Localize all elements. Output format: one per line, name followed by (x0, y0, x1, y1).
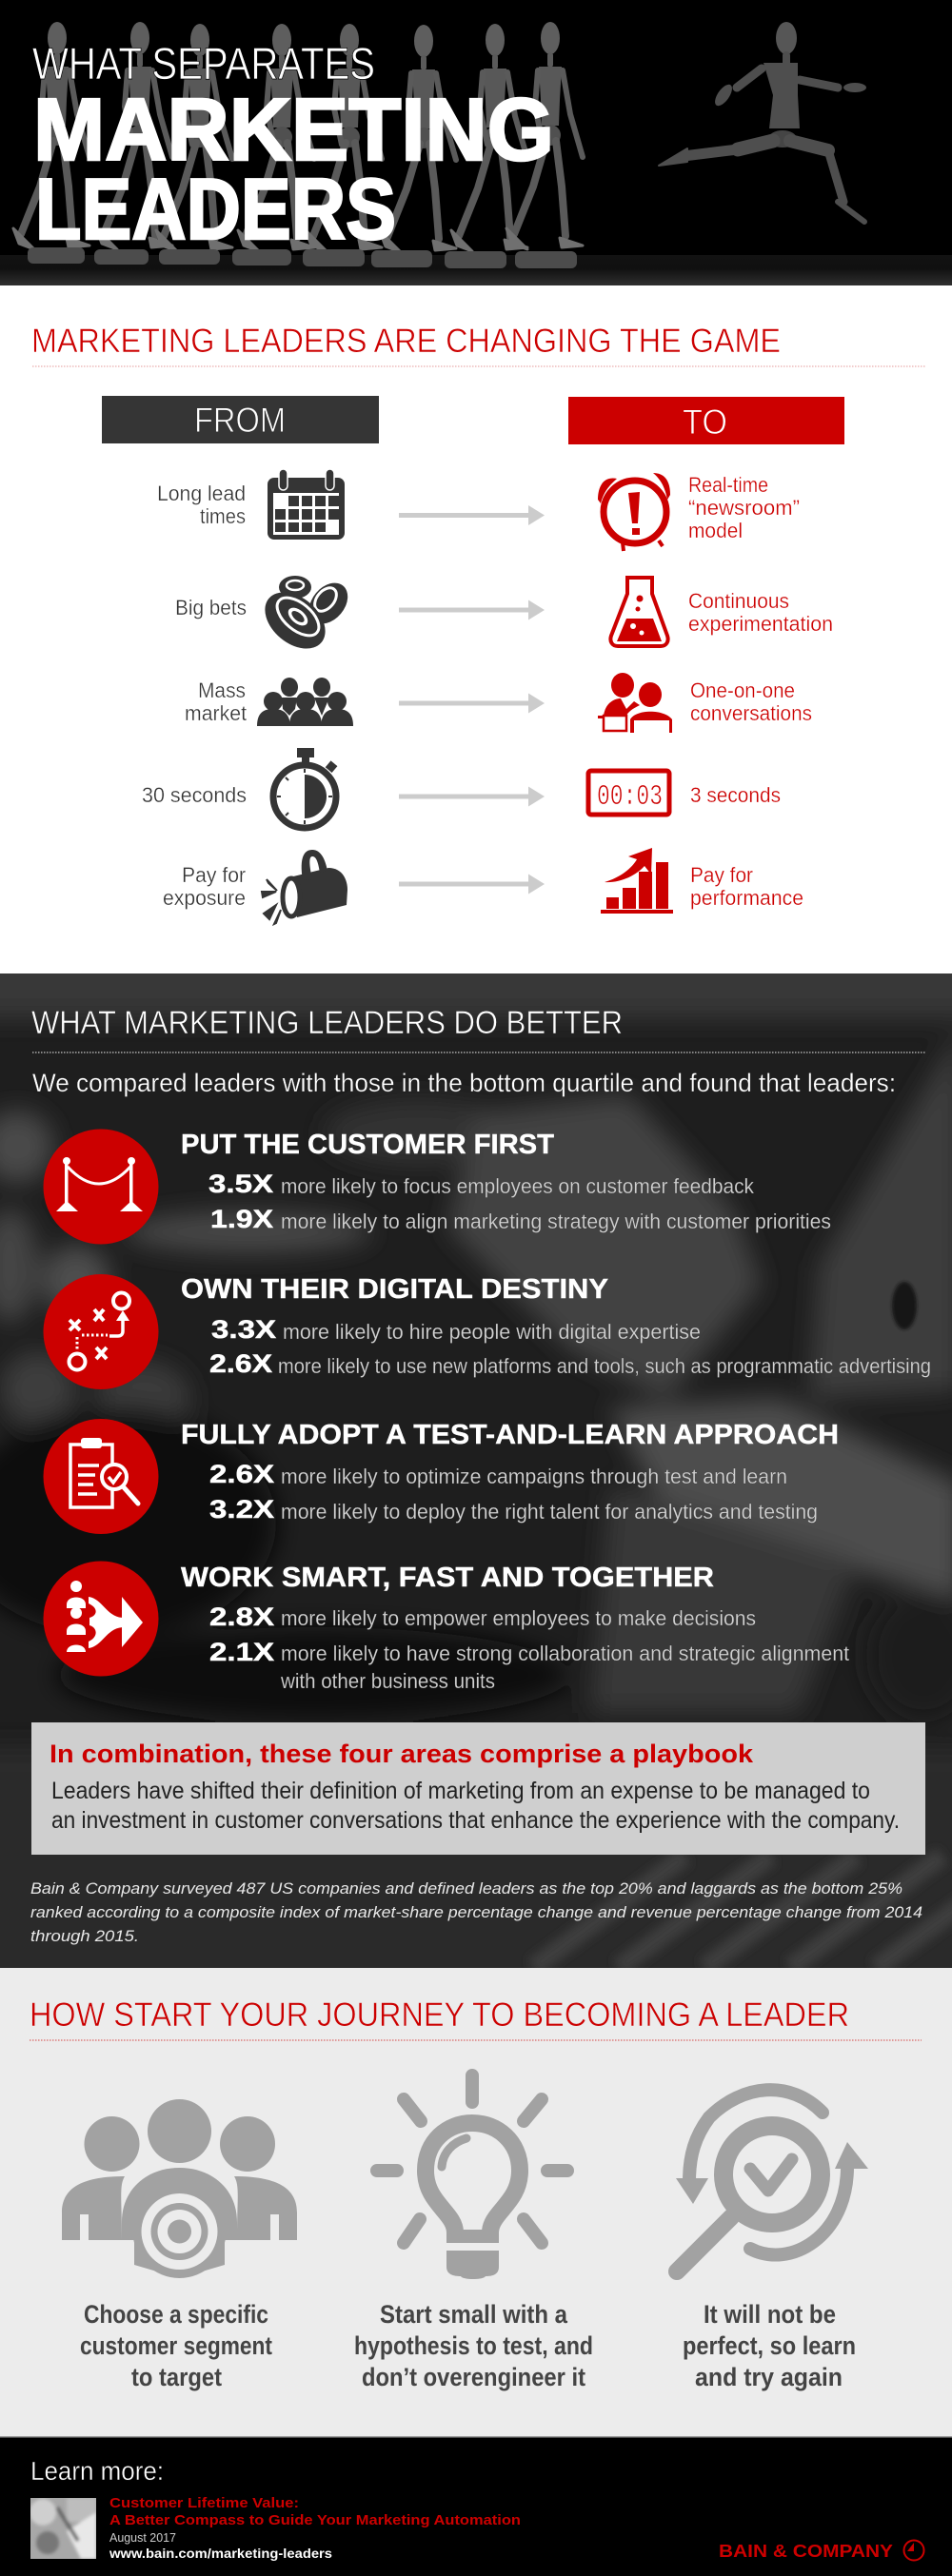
to labels: 3 seconds (690, 783, 781, 807)
to labels: Continuous (688, 589, 789, 613)
stat 3.3x: 3.3X (211, 1315, 276, 1344)
title (32, 38, 554, 258)
from header (102, 396, 379, 443)
item: test and learn (44, 1419, 839, 1534)
stat 2.1x (209, 1638, 849, 1693)
stat 3.5x: 3.5X (208, 1170, 273, 1198)
to header (568, 397, 844, 444)
stat 3.2x: 3.2X (209, 1495, 274, 1524)
report date: August 2017 (109, 2530, 176, 2545)
from labels: market (185, 701, 247, 725)
icon: growth chart (601, 848, 673, 914)
logo: bain & company: BAIN & COMPANY (719, 2542, 893, 2561)
stat 2.6x: 2.6X (209, 1460, 274, 1488)
stat 3.2x: more likely to deploy the right talent for analytics and testing (281, 1500, 818, 1524)
footnote: Bain & Company surveyed 487 US companies and defined leaders as the top 20% and laggards as the bottom 25% (30, 1879, 902, 1898)
report url: www.bain.com/marketing-leaders (109, 2546, 332, 2561)
heading: OWN THEIR DIGITAL DESTINY (181, 1274, 608, 1305)
footnote: through 2015. (30, 1927, 139, 1945)
heading: do better: WHAT MARKETING LEADERS DO BETTER (31, 1005, 623, 1041)
title line 3: LEADERS (35, 162, 396, 258)
panel: how to start (0, 1968, 952, 2437)
from labels: 30 seconds (142, 783, 247, 807)
arrows (399, 505, 545, 895)
caption: segment (80, 2300, 272, 2391)
callout: playbook: Leaders have shifted their definition of marketing from an expense to be managed to (51, 1778, 870, 1804)
icon: magnifier with check (676, 2090, 868, 2271)
icon: stopwatch (273, 748, 337, 828)
photo background (0, 952, 952, 1994)
icon: playbook diagram (44, 1274, 158, 1389)
icon: flask (610, 578, 668, 646)
icon: target audience (62, 2099, 297, 2278)
panel: from/to changes (31, 323, 925, 924)
caption: learn (683, 2300, 856, 2391)
to labels (688, 473, 833, 910)
from header: FROM (194, 401, 286, 440)
caption: hypothesis: Start small with a (380, 2300, 568, 2329)
from labels: Pay for (182, 863, 246, 887)
panel: what marketing leaders do better (0, 952, 952, 1994)
callout: playbook (31, 1722, 925, 1855)
heading: FULLY ADOPT A TEST-AND-LEARN APPROACH (181, 1420, 839, 1450)
icon: poker chips (254, 576, 355, 660)
heading: PUT THE CUSTOMER FIRST (181, 1130, 554, 1160)
stat 3.5x: more likely to focus employees on customer feedback (281, 1174, 755, 1198)
icon: clipboard with magnifier (44, 1419, 158, 1534)
icon: lightbulb (377, 2075, 567, 2279)
caption: learn: It will not be (704, 2300, 836, 2329)
title line 1: WHAT SEPARATES (32, 38, 375, 88)
panel: footer (0, 2436, 952, 2576)
caption: segment: to target (131, 2363, 222, 2391)
to header: TO (683, 403, 727, 442)
callout: playbook: In combination, these four areas comprise a playbook (50, 1740, 754, 1768)
item: put the customer first (44, 1129, 831, 1245)
logo: bain & company (719, 2541, 923, 2561)
icon: digital clock (588, 771, 669, 815)
to labels: Pay for (690, 863, 753, 887)
stat 3.5x (208, 1170, 755, 1198)
walking mannequins (13, 22, 583, 268)
caption: learn: and try again (695, 2363, 843, 2391)
caption: segment: customer segment (80, 2331, 272, 2360)
footnote: ranked according to a composite index of market-share percentage change and revenue percentage change from 2014 (30, 1903, 922, 1921)
caption: hypothesis: hypothesis to test, and (354, 2331, 593, 2360)
heading: WORK SMART, FAST AND TOGETHER (181, 1563, 714, 1593)
stat 2.1x: 2.1X (209, 1638, 274, 1666)
heading: changing the game: MARKETING LEADERS ARE CHANGING THE GAME (31, 323, 781, 360)
title line 2: MARKETING (33, 80, 554, 179)
to labels: Real-time (688, 473, 768, 497)
floor (0, 255, 952, 285)
heading: start your journey: HOW START YOUR JOURNEY TO BECOMING A LEADER (30, 1996, 849, 2034)
stat 1.9x: more likely to align marketing strategy with customer priorities (281, 1209, 831, 1233)
stat 2.6x: more likely to optimize campaigns through test and learn (281, 1465, 787, 1488)
stat 2.1x: more likely to have strong collaboration and strategic alignment (281, 1642, 849, 1665)
item: own their digital destiny (44, 1274, 931, 1389)
report thumbnail (30, 2498, 96, 2559)
caption: learn: perfect, so learn (683, 2331, 856, 2360)
from labels: Long lead (157, 482, 246, 505)
to labels: model (688, 519, 743, 542)
from labels: exposure (163, 886, 246, 910)
stat 2.8x: 2.8X (209, 1603, 274, 1631)
to labels: One-on-one (690, 678, 795, 702)
leaping mannequin (659, 22, 866, 222)
stat 2.8x: more likely to empower employees to make decisions (281, 1606, 756, 1630)
icon: calendar (268, 469, 345, 540)
icon: digital clock: 00:03 (597, 780, 663, 814)
icon: velvet rope (44, 1129, 158, 1245)
icon: people and merging arrow (44, 1561, 158, 1677)
intro text: We compared leaders with those in the bottom quartile and found that leaders: (32, 1069, 896, 1097)
stat 2.1x: with other business units (280, 1669, 495, 1693)
caption: hypothesis: don’t overengineer it (362, 2363, 585, 2391)
learn more label: Learn more: (30, 2456, 164, 2486)
stat 2.6x: 2.6X (209, 1349, 272, 1378)
icon: one-on-one conversation (598, 673, 672, 733)
footnote (30, 1879, 922, 1945)
stat 1.9x: 1.9X (210, 1205, 273, 1233)
to labels: performance (690, 886, 803, 910)
icon: alarm clock (598, 473, 670, 551)
from labels (142, 482, 247, 910)
hero banner (0, 0, 952, 285)
to labels: “newsroom” (688, 496, 800, 520)
from labels: Mass (198, 678, 246, 702)
from labels: times (200, 504, 246, 528)
from labels: Big bets (175, 596, 247, 619)
report title: Customer Lifetime Value: (109, 2495, 299, 2511)
caption: segment: Choose a specific (84, 2300, 268, 2329)
caption: hypothesis (354, 2300, 593, 2391)
to labels: conversations (690, 701, 812, 725)
stat 3.3x: more likely to hire people with digital expertise (283, 1320, 701, 1344)
icon: megaphone (262, 850, 347, 924)
to labels: experimentation (688, 612, 833, 636)
icon: crowd (257, 678, 353, 726)
item: work smart (44, 1561, 849, 1693)
panel: footer: A Better Compass to Guide Your Marketing Automation (109, 2512, 521, 2528)
